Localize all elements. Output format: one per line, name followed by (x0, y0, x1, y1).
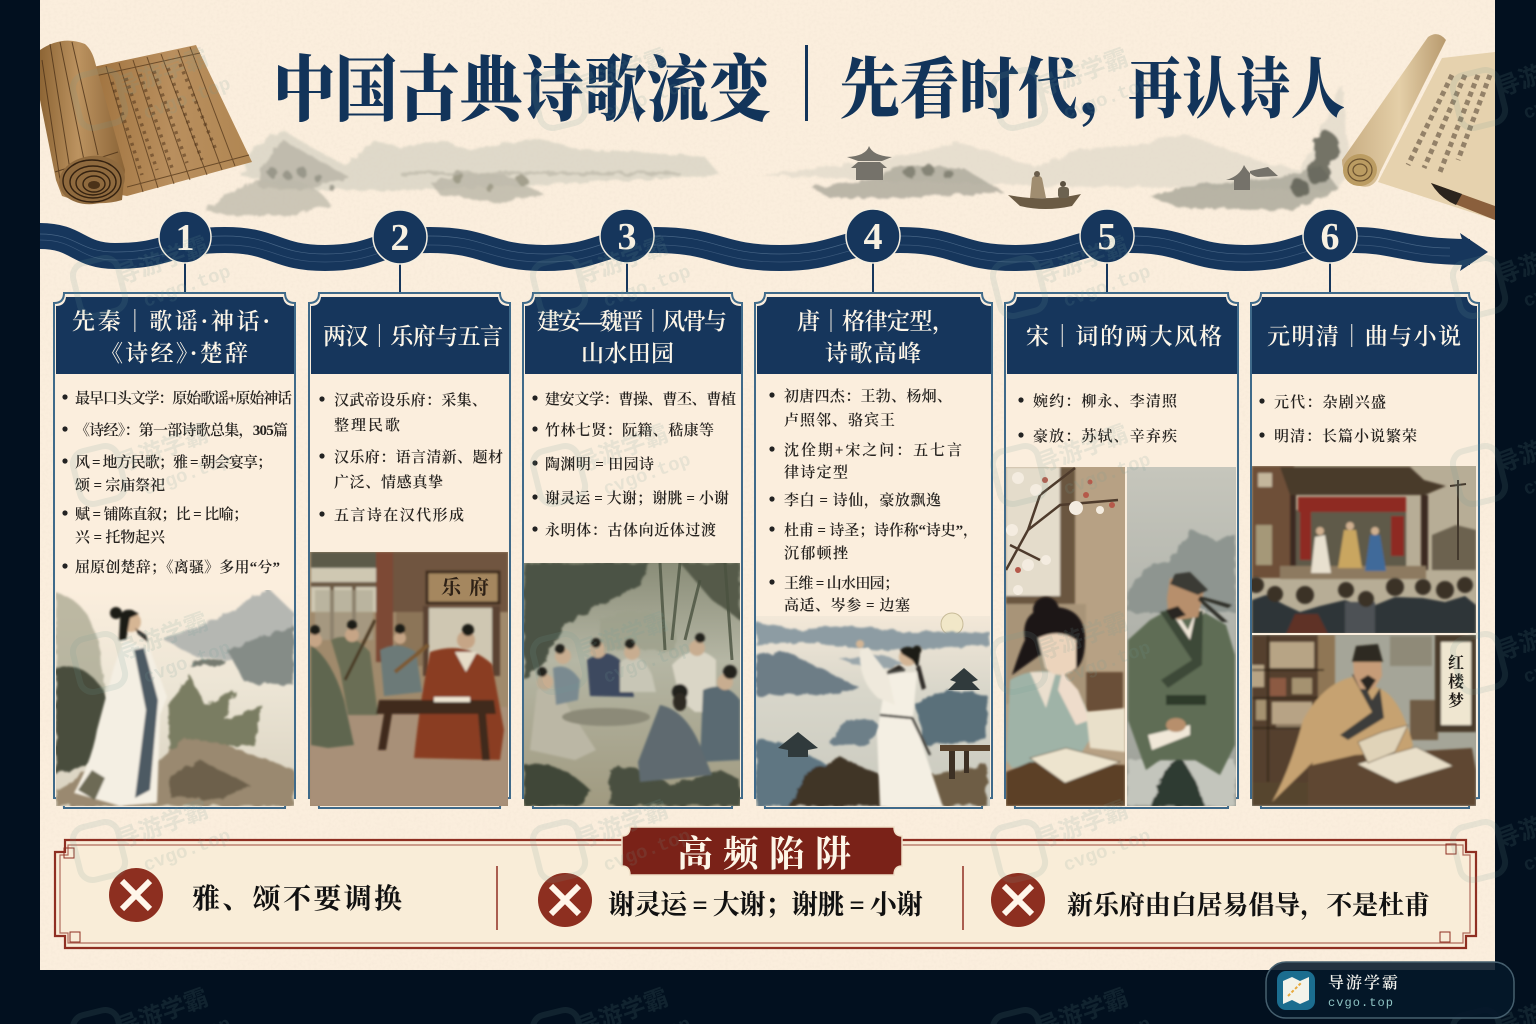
heading (1252, 297, 1477, 374)
text block: 初唐四杰：王勃、杨炯、 (784, 387, 952, 405)
panel: pitfalls (55, 827, 1476, 948)
illustration: 屈原 by the river (56, 587, 294, 806)
text block: 赋 = 铺陈直叙；比 = 比喻； (75, 505, 248, 523)
panel: 唐 (755, 293, 992, 808)
text block (532, 390, 736, 539)
logo badge: cvgo.top (1328, 996, 1393, 1010)
text block: 婉约：柳永、李清照 (1033, 392, 1178, 410)
text block: 五言诗在汉代形成 (334, 506, 464, 524)
timeline wave arrow (40, 233, 1488, 271)
logo badge: 导游学霸 (1328, 974, 1398, 992)
text block: 建安文学：曹操、曹丕、曹植 (545, 390, 736, 408)
step markers: 1 (176, 217, 194, 259)
illustration: novelist at desk: 红 (1448, 654, 1464, 672)
heading: 诗歌高峰 (825, 341, 921, 366)
title: 中国古典诗歌流变 (273, 51, 774, 131)
landscape ink painting (205, 85, 1350, 215)
icon: boat with figures (1008, 171, 1081, 209)
heading: 先秦｜歌谣·神话· (72, 309, 270, 334)
text block: 杜甫 = 诗圣；诗作称“诗史”， (784, 521, 978, 539)
illustration: 乐府 hall: 乐 府 (441, 576, 489, 599)
text block: 汉乐府：语言清新、题材 (334, 448, 503, 466)
heading: 唐｜格律定型， (797, 309, 955, 335)
panel: 先秦 (54, 293, 295, 808)
text block: 豪放：苏轼、辛弃疾 (1033, 427, 1177, 445)
title: ， (1080, 58, 1142, 127)
pitfall 2 (538, 873, 923, 927)
step markers: 3 (618, 216, 636, 258)
text block: 谢灵运 = 大谢；谢朓 = 小谢 (545, 489, 729, 507)
text block: 整理民歌 (334, 416, 400, 434)
text block: 李白 = 诗仙，豪放飘逸 (784, 491, 941, 509)
text block: 卢照邻、骆宾王 (784, 411, 895, 429)
icon: paper scroll and brush (1340, 34, 1495, 220)
title: 再认诗人 (1128, 54, 1345, 127)
illustration: opera stage (1248, 466, 1476, 634)
text block: 竹林七贤：阮籍、嵇康等 (545, 421, 714, 439)
text block: 兴 = 托物起兴 (75, 528, 166, 546)
text block: 陶渊明 = 田园诗 (545, 455, 654, 473)
illustration: 苏轼 seated (1127, 467, 1236, 806)
icon: bamboo slip scroll (40, 41, 252, 208)
text block (1018, 392, 1178, 445)
heading (1007, 297, 1237, 374)
icon: map logo (1277, 971, 1315, 1010)
title (273, 45, 1345, 131)
text block (319, 392, 503, 524)
text block: 王维 = 山水田园； (784, 574, 899, 592)
heading: 高频陷阱 (677, 834, 851, 874)
panel: 建安—魏晋 (523, 293, 742, 808)
step markers (159, 209, 1357, 293)
heading: 建安—魏晋｜风骨与 (537, 309, 727, 334)
panel: 元明清 (1248, 293, 1479, 808)
text block: 屈原创楚辞；《离骚》多用“兮” (75, 558, 280, 576)
text block: 明清：长篇小说繁荣 (1274, 427, 1417, 445)
illustration: novelist at desk (1252, 635, 1476, 806)
step markers: 5 (1098, 216, 1116, 258)
text block: 沈佺期+宋之问：五七言 (784, 442, 962, 459)
pitfall 1: 雅、颂不要调换 (192, 883, 402, 915)
illustration: bamboo grove gathering (524, 563, 740, 806)
pitfall 2: 谢灵运 = 大谢；谢朓 = 小谢 (608, 890, 923, 920)
text block: 《诗经》：第一部诗歌总集，305篇 (75, 421, 288, 439)
text block: 广泛、情感真挚 (334, 473, 443, 491)
illustration: novelist at desk: 梦 (1448, 691, 1464, 710)
heading (311, 297, 509, 374)
pitfall 3 (991, 873, 1430, 927)
icon: pavilion in landscape (847, 146, 1278, 190)
text block: 永明体：古体向近体过渡 (545, 521, 716, 539)
text block: 沉郁顿挫 (784, 544, 849, 562)
pitfall 1 (109, 868, 402, 922)
text block: 律诗定型 (784, 463, 848, 481)
step markers: 4 (864, 216, 882, 258)
heading: 两汉｜乐府与五言 (323, 324, 503, 349)
heading: 元明清｜曲与小说 (1267, 324, 1461, 349)
illustration: novelist at desk: 楼 (1448, 672, 1466, 691)
illustration: 李白 under the moon (756, 613, 990, 807)
title: 先看时代 (840, 54, 1079, 127)
text block (62, 389, 292, 576)
illustration: 乐府 hall (308, 552, 508, 806)
text block: 高适、岑参 = 边塞 (784, 596, 910, 614)
heading: 宋｜词的两大风格 (1026, 324, 1222, 349)
step markers: 2 (390, 217, 410, 259)
text block: 最早口头文学：原始歌谣+原始神话 (75, 389, 292, 407)
panel: 两汉 (308, 293, 510, 808)
heading (622, 827, 902, 875)
heading (56, 297, 294, 374)
text block: 风 = 地方民歌；雅 = 朝会宴享； (75, 453, 272, 471)
panel: 宋 (1005, 293, 1238, 808)
heading: 山水田园 (581, 341, 674, 366)
heading (525, 297, 741, 374)
heading (757, 297, 991, 374)
text block (769, 387, 978, 614)
heading: 《诗经》·楚辞 (100, 341, 248, 366)
step markers: 6 (1320, 216, 1340, 258)
text block: 汉武帝设乐府：采集、 (334, 392, 487, 409)
text block: 元代：杂剧兴盛 (1274, 393, 1386, 411)
illustration: 李清照 reading (1006, 467, 1125, 806)
text block: 颂 = 宗庙祭祀 (75, 477, 165, 494)
text block (1259, 393, 1417, 445)
logo badge (1266, 962, 1514, 1018)
pitfall 3: 新乐府由白居易倡导，不是杜甫 (1067, 891, 1430, 921)
